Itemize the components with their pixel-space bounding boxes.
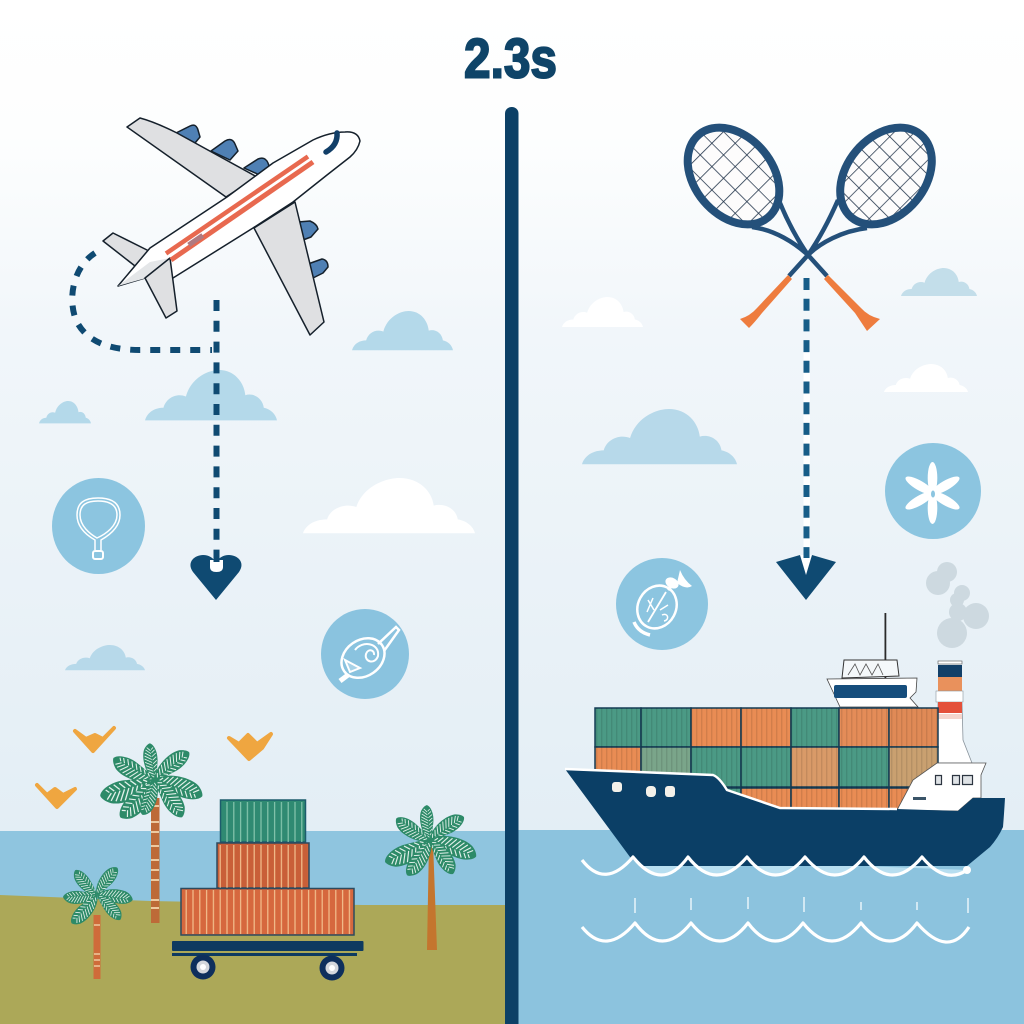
lower engines [298,221,328,278]
palm: tall centre [98,743,206,923]
bird 2 [229,734,271,759]
upper wing [127,118,257,197]
lower wing [254,202,324,335]
center divider [505,107,518,1024]
left racket strings [669,110,798,242]
portholes [612,782,675,797]
funnel [936,661,972,763]
cloud: right top [901,268,977,296]
cloud: right white upper [562,297,643,327]
cloud: right white [884,364,968,392]
icon circle: ball and handle [321,609,409,699]
mast [884,613,886,679]
wave highlight band [633,857,967,875]
upper engines [176,125,270,176]
left ground [0,895,506,1024]
arrow: heart-shaped left [190,550,242,600]
cloud: left middle [145,370,277,420]
cloud: left low [65,645,145,670]
cockpit window [326,133,337,152]
racket frames [669,110,951,276]
cloud: right large [582,409,737,464]
palm: small left [63,863,134,979]
orange grips [740,275,792,328]
left sea [0,831,506,911]
deck line [565,769,897,809]
wave line upper [582,857,971,875]
icon circle: flower [885,443,981,539]
cloud: left small [39,401,91,423]
icon circle: racket outline [52,478,145,574]
deck house [897,763,986,811]
right sea [518,830,1024,1024]
bird 3 [37,785,75,807]
truck with containers [172,800,364,980]
container long [181,888,354,935]
container red [217,843,309,888]
wave ticks [635,897,968,913]
bridge [827,660,918,707]
title: 2.3s [464,26,557,90]
tail cone shade [118,258,172,286]
hull [565,769,1005,866]
fuselage [118,132,360,286]
cloud: left upper [352,311,453,350]
icon: plane [103,118,360,335]
wheel right [320,956,344,980]
cloud: left white [303,478,475,533]
tail fin lower [145,258,177,318]
arrow: right dashed line [804,278,810,558]
palm: right [382,805,480,950]
stripe mark [187,233,204,247]
smoke [926,562,989,648]
icon: crossed rackets [669,110,951,331]
icon circle: fruit [616,558,708,650]
cargo containers [595,708,938,810]
bird 1 [75,728,114,751]
red stripes [166,156,313,260]
arrowhead right [776,552,836,600]
container ship [565,613,1005,866]
flight path dashed [72,253,216,562]
tail fin upper [103,233,149,266]
wave line lower [582,923,969,942]
container green [220,800,306,842]
wheel left [190,954,216,980]
right racket strings [821,110,951,242]
trailer bed [172,941,364,951]
